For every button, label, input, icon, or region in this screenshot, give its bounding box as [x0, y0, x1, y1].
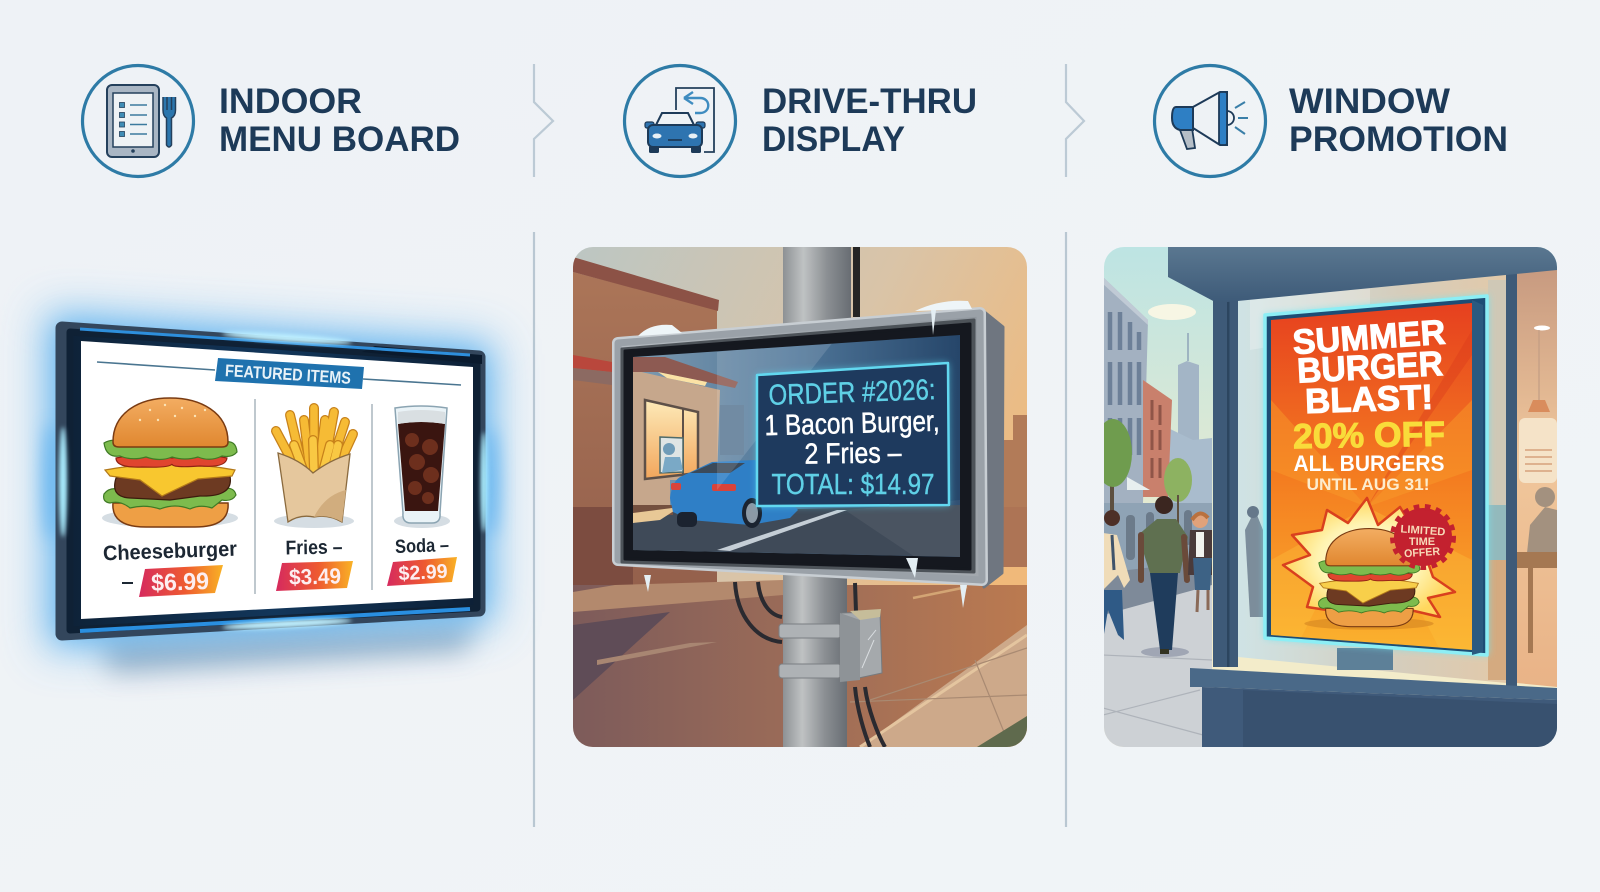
label: cheeseburger price: [103, 538, 237, 597]
heading: window promotion: WINDOW: [1289, 82, 1450, 121]
burst behind burger: [1283, 498, 1455, 623]
street background: [573, 247, 1027, 747]
poster artwork: 20% OFF: [1293, 415, 1445, 456]
limited time offer badge: [1393, 507, 1453, 567]
featured items banner: FEATURED ITEMS: [225, 361, 351, 388]
heading: indoor menu board: [219, 82, 460, 159]
icon: car at drive-thru: [624, 66, 736, 176]
order panel: ORDER #2026:: [768, 374, 936, 412]
poster frame with neon glow: [1265, 295, 1488, 655]
heading: drive-thru display: [762, 82, 977, 159]
header: window promotion: [1154, 66, 1508, 176]
icon: cheeseburger: [102, 398, 238, 528]
panel: drive-thru display scene: [573, 247, 1027, 747]
arrow divider 1: [534, 64, 553, 177]
label: fries price: Fries –: [285, 537, 343, 559]
heading: window promotion: PROMOTION: [1289, 120, 1508, 159]
heading: drive-thru display: DRIVE-THRU: [762, 82, 977, 121]
pole and mounting: [735, 247, 885, 747]
icon: tablet menu and fork: [82, 66, 194, 176]
featured items banner: [97, 358, 461, 389]
label: cheeseburger price: $6.99: [151, 568, 210, 597]
heading: indoor menu board: INDOOR: [219, 82, 362, 121]
order panel: TOTAL: $14.97: [772, 469, 934, 501]
poster artwork: [1271, 303, 1472, 650]
outdoor sign housing: [618, 301, 1003, 608]
city street background: [1094, 247, 1557, 747]
order panel: [757, 363, 949, 506]
tablet bezel: [59, 328, 488, 634]
heading: indoor menu board: MENU BOARD: [219, 120, 460, 159]
icon: poster burger: [1304, 529, 1434, 630]
tablet glow and shadow: [42, 310, 500, 672]
header: drive-thru display: [624, 66, 977, 176]
display screen content: [633, 335, 960, 557]
poster artwork: BURGER: [1296, 344, 1444, 391]
order panel: 2 Fries –: [804, 437, 902, 471]
arrow divider 2: [1066, 64, 1084, 177]
label: soda price: Soda –: [395, 535, 449, 558]
icon: fries: [274, 408, 354, 528]
tablet screen: [81, 341, 473, 619]
order panel: 1 Bacon Burger,: [764, 406, 940, 442]
label: soda price: $2.99: [398, 561, 448, 585]
limited time offer badge: LIMITED: [1400, 523, 1446, 539]
icon: megaphone: [1154, 66, 1266, 176]
column dividers: [534, 232, 1066, 827]
panel: window promotion scene: [1094, 247, 1557, 747]
label: cheeseburger price: Cheeseburger: [103, 538, 237, 565]
poster artwork: SUMMER: [1291, 313, 1447, 362]
label: fries price: [276, 537, 353, 591]
poster artwork: UNTIL AUG 31!: [1306, 475, 1430, 494]
limited time offer badge: OFFER: [1404, 546, 1440, 560]
poster artwork: BLAST!: [1304, 378, 1434, 421]
icon: soda glass: [394, 406, 450, 528]
pedestrians: [1103, 496, 1212, 657]
heading: window promotion: [1289, 82, 1508, 159]
heading: drive-thru display: DISPLAY: [762, 120, 905, 159]
storefront: [1168, 247, 1557, 747]
panel: indoor menu board tablet: [42, 310, 500, 672]
poster artwork: ALL BURGERS: [1294, 451, 1444, 476]
label: fries price: $3.49: [289, 563, 341, 590]
item dividers: [255, 399, 372, 594]
label: soda price: [387, 535, 457, 586]
limited time offer badge: TIME: [1409, 536, 1435, 548]
header: indoor menu board: [82, 66, 460, 176]
